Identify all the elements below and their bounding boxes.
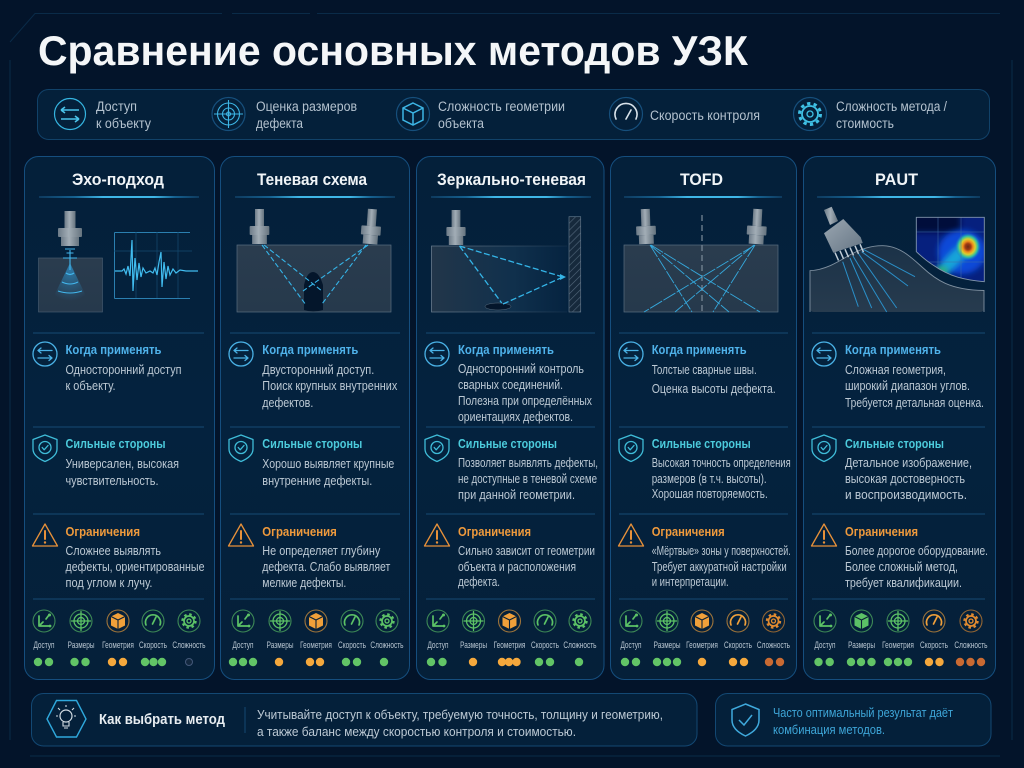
metric: size: Размеры — [68, 640, 95, 650]
text: when — [458, 362, 593, 424]
section: limits — [228, 514, 400, 590]
icon: arrows — [425, 342, 449, 366]
text: strengths: Универсален, высокая — [66, 457, 179, 471]
metric: access: Доступ — [814, 640, 836, 650]
metric: complexity — [954, 610, 988, 666]
heading: shadow: Теневая схема — [257, 170, 367, 189]
text: limits: требует квалификации. — [845, 576, 962, 590]
text: limits: и интерпретации. — [652, 575, 729, 589]
metric: complexity: Сложность — [757, 640, 790, 650]
metric: geometry: Геометрия — [300, 640, 332, 650]
text: note: Часто оптимальный результат даёт — [773, 705, 953, 720]
text: limits: мелкие дефекты. — [262, 576, 346, 590]
text: when: Двусторонний доступ. — [262, 363, 374, 377]
text: strengths: Высокая точность определения — [652, 456, 791, 470]
text: when: Оценка высоты дефекта. — [652, 382, 776, 396]
section: when to use — [619, 333, 788, 396]
text: when: Поиск крупных внутренних — [262, 379, 398, 393]
heading: when: Когда применять — [66, 342, 162, 357]
text: advice: Учитывайте доступ к объекту, требуемую точность, толщину и геометрию, — [257, 707, 663, 722]
metric row: TOFD — [620, 610, 790, 666]
text: limits: Сложнее выявлять — [66, 544, 161, 558]
heading: limits: Ограничения — [458, 524, 531, 539]
heading: strengths: Сильные стороны — [262, 436, 362, 451]
metric: access: Доступ — [232, 640, 254, 650]
text: strengths — [66, 457, 179, 488]
icon: warning — [228, 524, 254, 546]
heading: TOFD: TOFD — [680, 170, 723, 189]
legend item: geometry: объекта — [438, 116, 484, 131]
text: strengths: высокая достоверность — [845, 472, 965, 486]
metric: speed — [139, 610, 167, 666]
legend item: defect size — [212, 98, 357, 131]
metric: geometry — [102, 610, 134, 666]
text: when — [262, 363, 398, 410]
panel: PAUT method — [804, 156, 996, 680]
metric: size — [653, 610, 681, 666]
section: when to use — [425, 333, 595, 424]
metric: access — [620, 610, 642, 666]
heading: strengths: Сильные стороны — [66, 436, 166, 451]
icon: warning — [618, 524, 644, 546]
heading: limits: Ограничения — [845, 524, 918, 539]
text: strengths: Хорошо выявляет крупные — [262, 457, 394, 471]
panel: mirror-shadow method — [416, 156, 604, 680]
icon: shield check — [732, 704, 759, 736]
metric: complexity — [563, 610, 597, 666]
text: limits — [66, 544, 205, 590]
metric: size: Размеры — [267, 640, 294, 650]
text: strengths: при данной геометрии. — [458, 488, 575, 502]
section: limits — [618, 514, 791, 589]
metric: speed — [338, 610, 366, 666]
panel: through-transmission method — [220, 156, 410, 680]
text: when: Односторонний контроль — [458, 362, 584, 376]
heading: mirror: Зеркально-теневая — [437, 170, 586, 189]
panel: legend — [38, 90, 990, 140]
icon: warning — [424, 524, 450, 546]
text: when: Полезна при определённых — [458, 394, 593, 408]
section: strengths — [812, 427, 985, 502]
metric: size: Размеры — [460, 640, 487, 650]
text: when: Толстые сварные швы. — [652, 363, 757, 377]
panel: echo method — [24, 156, 214, 680]
text: when — [66, 363, 182, 393]
text: advice: а также баланс между скоростью контроля и стоимостью. — [257, 724, 576, 739]
heading: when: Когда применять — [652, 342, 747, 357]
text: when: Сложная геометрия, — [845, 363, 946, 377]
section: when to use — [229, 333, 400, 410]
illustration: echo probe and block — [38, 211, 102, 312]
metric: access — [427, 610, 449, 666]
metric: geometry: Геометрия — [494, 640, 525, 650]
text: limits: дефекта. — [458, 575, 500, 589]
heading: limits: Ограничения — [262, 524, 337, 539]
metric: geometry — [300, 610, 332, 666]
metric: speed — [724, 610, 752, 666]
heading: strengths: Сильные стороны — [458, 436, 557, 451]
legend item: access — [54, 98, 151, 131]
metric row: echo — [33, 610, 206, 666]
icon: warning — [32, 524, 58, 546]
heading: strengths: Сильные стороны — [845, 436, 944, 451]
metric: size — [267, 610, 294, 666]
legend item: complexity: Сложность метода / — [836, 99, 947, 114]
text: limits — [652, 544, 791, 589]
metric: speed: Скорость — [920, 640, 948, 650]
section: strengths — [229, 427, 400, 488]
metric: speed — [531, 610, 559, 666]
metric: geometry: Геометрия — [686, 640, 718, 650]
text: limits: дефекты, ориентированные — [66, 560, 205, 574]
text: limits: Более сложный метод, — [845, 560, 958, 574]
icon: shield — [619, 435, 643, 462]
legend item: complexity: стоимость — [836, 116, 894, 131]
metric: complexity: Сложность — [370, 640, 404, 650]
metric: size: Размеры — [654, 640, 681, 650]
metric: size — [68, 610, 95, 666]
icon: arrows — [33, 342, 57, 366]
text: when: широкий диапазон углов. — [845, 379, 970, 393]
icon: arrows — [619, 342, 643, 366]
legend item: geometry: Сложность геометрии — [438, 99, 565, 114]
text: when: сварных соединений. — [458, 378, 563, 392]
legend item: defect size: дефекта — [256, 116, 303, 131]
panel: TOFD method — [610, 156, 796, 680]
heading: strengths: Сильные стороны — [652, 436, 751, 451]
text: limits: Требует аккуратной настройки — [652, 560, 787, 574]
text: strengths: и воспроизводимость. — [845, 488, 967, 502]
icon: shield — [425, 435, 449, 462]
metric: access — [33, 610, 55, 666]
icon: shield — [33, 435, 57, 462]
section: limits — [812, 514, 988, 590]
legend item: access: Доступ — [96, 99, 137, 114]
metric: size: Размеры — [848, 640, 875, 650]
text: advice — [257, 707, 663, 739]
metric: speed — [920, 610, 948, 666]
text: limits: дефекта. Слабо выявляет — [262, 560, 391, 574]
legend item: speed: Скорость контроля — [650, 108, 760, 123]
panel: combination note — [716, 694, 991, 746]
heading: limits: Ограничения — [652, 524, 725, 539]
icon: arrows — [229, 342, 253, 366]
text: limits — [458, 544, 595, 589]
metric: geometry — [686, 610, 718, 666]
text: strengths: чувствительность. — [66, 474, 158, 488]
metric: complexity — [172, 610, 206, 666]
text: limits — [262, 544, 391, 590]
metric: complexity: Сложность — [563, 640, 597, 650]
text: limits: «Мёртвые» зоны у поверхностей. — [652, 544, 791, 558]
metric: complexity — [757, 610, 790, 666]
metric: speed: Скорость — [531, 640, 559, 650]
panel: how to choose — [32, 694, 697, 746]
section: strengths — [33, 427, 204, 488]
title: Сравнение основных методов УЗК — [38, 27, 748, 74]
text: limits: Более дорогое оборудование. — [845, 544, 988, 558]
text: limits — [845, 544, 988, 590]
heading: limits: Ограничения — [66, 524, 140, 539]
metric row: shadow — [229, 610, 404, 666]
text: when: Требуется детальная оценка. — [845, 396, 984, 410]
text: limits: под углом к лучу. — [66, 576, 152, 590]
text: when — [652, 363, 776, 396]
icon: shield — [229, 435, 253, 462]
text: strengths — [845, 456, 972, 502]
icon: lightbulb in hexagon — [47, 700, 86, 737]
metric: speed: Скорость — [724, 640, 752, 650]
section: strengths — [425, 427, 598, 502]
metric: geometry: Геометрия — [882, 640, 914, 650]
text: note — [773, 705, 953, 737]
metric row: PAUT — [814, 610, 988, 666]
legend item: geometry — [396, 98, 565, 131]
chart: PAUT heatmap — [916, 216, 985, 282]
text: when: Односторонний доступ — [66, 363, 182, 377]
icon: warning — [812, 524, 836, 546]
text: strengths: не доступные в теневой схеме — [458, 472, 597, 486]
metric: geometry — [882, 610, 914, 666]
text: strengths — [458, 456, 598, 502]
metric: geometry: Геометрия — [102, 640, 134, 650]
legend item: defect size: Оценка размеров — [256, 99, 357, 114]
metric: access: Доступ — [33, 640, 55, 650]
chart: echo waveform — [114, 232, 198, 298]
heading: when: Когда применять — [458, 342, 554, 357]
metric: access: Доступ — [427, 640, 449, 650]
illustration: mirror scheme — [432, 210, 581, 312]
section: strengths — [619, 427, 791, 501]
metric: size — [460, 610, 487, 666]
metric: access — [814, 610, 836, 666]
text: when: дефектов. — [262, 396, 313, 410]
text: strengths: внутренние дефекты. — [262, 474, 372, 488]
text: note: комбинация методов. — [773, 722, 885, 737]
text: when: к объекту. — [66, 379, 116, 393]
metric: size — [847, 610, 876, 666]
text: strengths — [262, 457, 394, 488]
icon: shield — [812, 435, 836, 462]
metric: access: Доступ — [620, 640, 642, 650]
illustration: shadow scheme — [237, 208, 391, 312]
section: limits — [32, 514, 205, 590]
text: strengths: Позволяет выявлять дефекты, — [458, 456, 598, 470]
icon: arrows — [812, 342, 836, 366]
text: strengths: Хорошая повторяемость. — [652, 487, 768, 501]
legend item: speed — [610, 98, 760, 130]
heading: when: Когда применять — [845, 342, 941, 357]
legend item: access: к объекту — [96, 116, 151, 131]
section: limits — [424, 514, 595, 589]
metric row: mirror — [427, 610, 597, 666]
section: when to use — [812, 333, 985, 410]
text: strengths: размеров (в т.ч. высоты). — [652, 472, 767, 486]
metric: complexity: Сложность — [172, 640, 206, 650]
heading: PAUT: PAUT — [875, 170, 919, 189]
text: when: ориентациях дефектов. — [458, 410, 573, 424]
heading: when: Когда применять — [262, 342, 358, 357]
text: limits: объекта и расположения — [458, 560, 576, 574]
text: strengths: Детальное изображение, — [845, 456, 972, 470]
text: when — [845, 363, 984, 410]
section: when to use — [33, 333, 204, 393]
metric: complexity — [370, 610, 404, 666]
metric: speed: Скорость — [139, 640, 167, 650]
metric: geometry — [494, 610, 525, 666]
text: strengths — [652, 456, 791, 501]
metric: speed: Скорость — [338, 640, 366, 650]
text: limits: Сильно зависит от геометрии — [458, 544, 595, 558]
illustration: TOFD scheme — [624, 209, 778, 312]
metric: access — [229, 610, 257, 666]
heading: how to choose: Как выбрать метод — [99, 712, 225, 728]
metric: complexity: Сложность — [954, 640, 988, 650]
text: limits: Не определяет глубину — [262, 544, 381, 558]
legend item: complexity — [794, 98, 947, 131]
illustration: PAUT scheme — [810, 207, 984, 312]
heading: echo: Эхо-подход — [72, 170, 164, 189]
